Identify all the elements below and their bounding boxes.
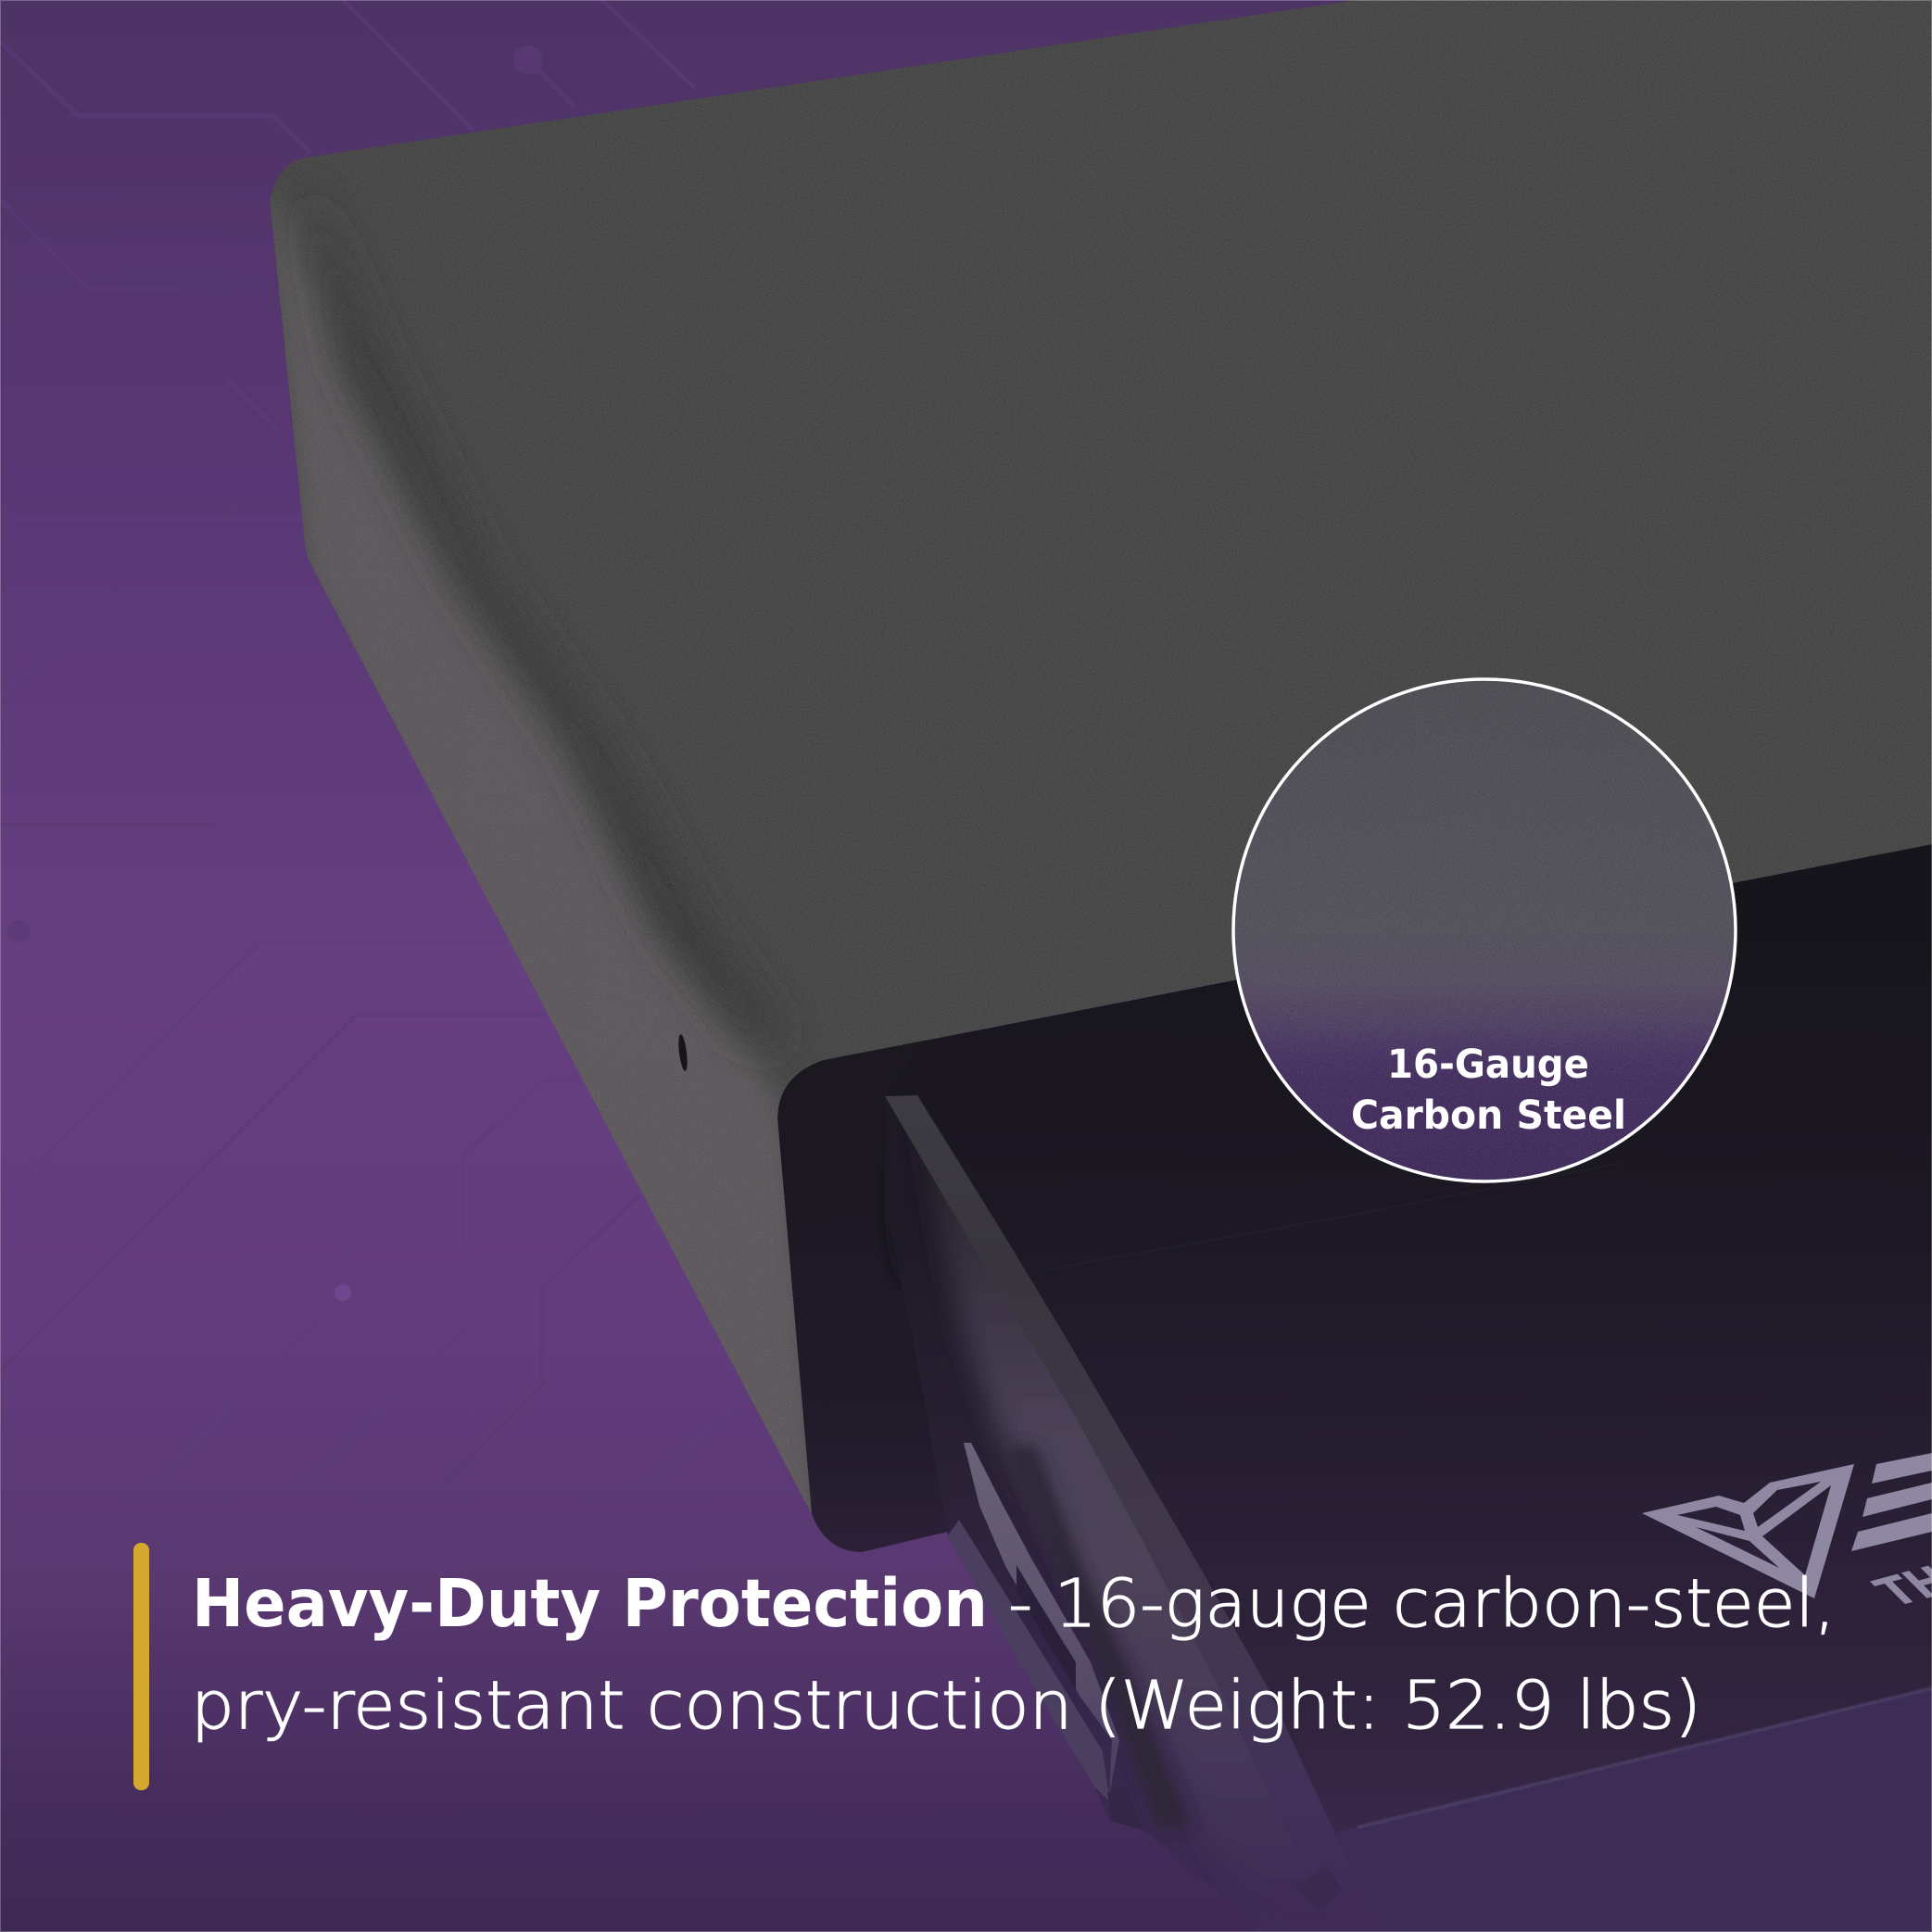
callout label: Carbon Steel [1351,1092,1626,1139]
background circuit traces [0,0,741,1483]
product: logo on the drawer [1642,1453,1932,1615]
rail face highlight [930,1173,1292,1844]
product: steel floor panel and seam [1047,1163,1932,1932]
product: front opening [777,1038,948,1552]
product: small dark hole in the side [677,1034,688,1071]
rail top strip [885,1095,1278,1711]
callout label: 16-Gauge [1387,1042,1589,1088]
product: steel shell with top and bevel [270,0,1932,1514]
dark groove [1004,1446,1191,1830]
rail end cap [1295,1867,1343,1911]
caption second line: pry-resistant construction (Weight: 52.9 lbs) [191,1667,1701,1744]
callout: magnified steel circle [1233,679,1736,1181]
slide plate [964,1443,1119,1796]
slide slot [1017,1565,1076,1690]
slide outer flange [948,1520,1110,1802]
product: interior of the drawer [815,844,1932,1932]
product: drawer side rail [885,1095,1353,1873]
caption first line: - 16-gauge carbon-steel, [1008,1565,1836,1642]
caption bold lead: Heavy-Duty Protection [192,1565,988,1642]
main caption text [191,1565,1836,1744]
slide foot [1107,1784,1143,1830]
gold accent bar [133,1543,149,1790]
